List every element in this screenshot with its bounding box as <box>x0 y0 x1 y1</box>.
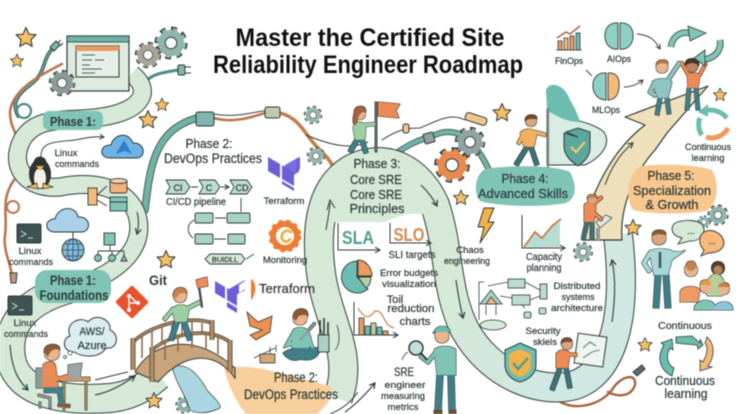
person: at whiteboard <box>552 333 607 390</box>
icon: terminal lower <box>8 296 32 315</box>
text: Linux commands lower: Linux <box>14 318 37 329</box>
text: Security skiels <box>526 326 561 348</box>
text: SRE engineer measuring metrics: metrics <box>388 402 419 413</box>
text: Git: Git <box>149 272 167 288</box>
cloud: AWS Azure: Azure <box>78 340 106 352</box>
text: Chaos engineering: Chaos <box>456 245 484 256</box>
icon: penguin <box>27 156 53 189</box>
text: AIOps: AIOps <box>607 54 631 65</box>
text: Linux commands middle <box>9 246 53 268</box>
text: CI/CD pipeline: CI/CD pipeline <box>166 197 226 208</box>
title: Master the Certified Site <box>236 24 505 52</box>
cable plugs <box>10 40 645 376</box>
text: Linux commands upper: commands <box>55 159 99 170</box>
arrows from ops icons <box>586 34 660 87</box>
arrow: growth <box>585 86 708 240</box>
icon: terraform top <box>268 157 300 191</box>
person: presenter <box>644 230 686 308</box>
text: SRE engineer measuring metrics: measuring <box>381 391 425 402</box>
chart: pie error budgets <box>341 260 372 293</box>
road: phase 1 lower <box>10 212 158 399</box>
icon: terminal upper <box>17 224 41 243</box>
tool box <box>254 345 276 363</box>
heading: Phase 3: Core SRE <box>350 187 402 202</box>
text: Continuous learning bottom: Continuous <box>655 374 715 388</box>
text: Toil reduction charts: Toil <box>387 294 403 306</box>
icon: speech bubbles: ... <box>687 226 695 236</box>
label: Phase 5 <box>628 165 717 214</box>
CI/CD pipeline chevrons: CD <box>236 183 249 193</box>
text: Toil reduction charts: reduction <box>388 303 434 315</box>
text: Chaos engineering <box>444 245 490 267</box>
icon: azure cloud <box>102 135 143 158</box>
heading: Phase 3: Core SRE <box>350 172 402 187</box>
heading: Phase 3 <box>350 156 405 216</box>
label: Phase 1 Foundations <box>35 270 111 303</box>
text: MLOps: MLOps <box>592 105 620 116</box>
wire arrow to azure <box>41 137 104 157</box>
text: Toil reduction charts <box>387 294 434 328</box>
text: Linux commands middle: commands <box>9 257 53 268</box>
icon: mug of tools <box>318 318 329 352</box>
text: Chaos engineering: engineering <box>444 256 490 267</box>
label: Phase 1 <box>43 111 103 130</box>
cables: plugs and wires <box>5 46 635 406</box>
icon: AIOps brain <box>605 23 633 49</box>
chart: SLO: SLO <box>394 225 424 245</box>
CI/CD pipeline chevrons: C <box>206 183 213 193</box>
label: Phase 1 Foundations: Foundations <box>40 288 108 303</box>
text: Capacity planning: planning <box>526 263 562 274</box>
text: Capacity planning: Capacity <box>526 252 562 263</box>
icon: cycle arrows top <box>671 26 720 66</box>
label: Phase 4 Advanced Skills: Advanced Skills <box>478 186 568 201</box>
icon: git <box>115 285 149 319</box>
person: Phase 3 with flag <box>350 102 400 153</box>
text: Continuous learning upper: Continuous <box>685 142 731 153</box>
text: SRE engineer measuring metrics <box>381 365 426 413</box>
text: SRE engineer measuring metrics: SRE <box>394 365 414 379</box>
title: Reliability Engineer Roadmap <box>213 51 523 79</box>
text: Continuous learning bottom <box>655 374 715 401</box>
road: phase 2 orange section <box>224 367 332 414</box>
person: sitting with wrench <box>283 309 320 360</box>
label: Phase 5: Phase 5: <box>648 168 694 183</box>
icon: MLOps brain <box>593 73 619 100</box>
text: Linux commands lower <box>4 318 48 340</box>
text: SRE engineer measuring metrics: engineer <box>384 380 426 391</box>
cloud: AWS Azure <box>64 317 116 358</box>
bridge <box>133 320 235 382</box>
text: Linux commands upper: Linux <box>55 148 78 159</box>
text: Continuous learning bottom: learning <box>664 387 708 401</box>
text: Error budgets: visualization <box>382 279 436 290</box>
label: Phase 2 DevOps Practices: DevOps Practices <box>244 387 338 402</box>
icon: cloud and globe <box>47 209 89 261</box>
icon: grafana monitoring <box>270 221 300 251</box>
text: Error budgets: Error budgets <box>380 268 438 279</box>
label: Phase 5: & Growth <box>646 197 698 212</box>
terraform big label: Terraform <box>259 281 315 296</box>
text: SLI targets: SLI targets <box>388 250 436 261</box>
icon: cycle arrows lower <box>698 104 728 138</box>
icon: speech bubbles: ... <box>708 236 716 246</box>
icon: security shield <box>505 343 536 382</box>
label: Phase 4 Advanced Skills <box>476 166 575 206</box>
label: Phase 2 DevOps Practices: Phase 2: <box>274 370 318 385</box>
label: Phase 2 DevOps Practices <box>244 370 338 402</box>
window: terminal <box>67 36 129 91</box>
chart: toil bars <box>354 302 398 335</box>
cloud: AWS Azure: AWS/ <box>80 326 105 338</box>
river <box>172 366 220 413</box>
icon: FinOps chart <box>556 26 582 50</box>
diagram: distributed systems <box>479 279 547 330</box>
heading: Phase 2 DevOps <box>164 136 262 166</box>
heading: Phase 2 DevOps: Phase 2: <box>186 136 232 151</box>
CI/CD pipeline chevrons <box>166 180 252 194</box>
chart: SLA <box>338 223 380 250</box>
text: Distributed systems architecture: architecture <box>551 303 603 314</box>
text: Security skiels: Security <box>526 326 561 337</box>
label: Phase 1: Phase 1: <box>50 114 96 129</box>
people: audience <box>680 261 733 310</box>
label: Phase 1 Foundations: Phase 1: <box>50 273 96 288</box>
text: FinOps: FinOps <box>555 56 583 67</box>
road: phase 3 and 4 <box>319 160 621 414</box>
person: on bridge with flag <box>164 277 208 340</box>
chart: capacity planning <box>522 215 565 248</box>
title <box>213 24 523 79</box>
text: Toil reduction charts: charts <box>400 316 431 328</box>
icon: speech bubbles <box>672 220 724 256</box>
icon: terraform lower <box>215 280 245 313</box>
text: Linux commands lower: commands <box>4 329 48 340</box>
text: Distributed systems architecture <box>551 281 603 314</box>
person: walking <box>516 115 546 165</box>
text: Linux commands upper <box>55 148 99 170</box>
chart: SLA: SLA <box>342 228 374 248</box>
text: Distributed systems architecture: systems <box>562 292 595 303</box>
icon: cycle arrows bottom <box>660 336 713 376</box>
icon: database and document <box>88 178 127 211</box>
icon: orange fox shape <box>247 312 272 340</box>
road: phase 1 upper <box>17 74 142 288</box>
flow diagram: BUIDLL <box>212 255 238 264</box>
text: Security skiels: skiels <box>533 337 557 348</box>
person: top of road with podium <box>583 194 612 241</box>
text: Linux commands middle: Linux <box>19 246 42 257</box>
heading: Phase 2 DevOps: DevOps Practices <box>164 151 262 166</box>
text: Error budgets <box>380 268 438 290</box>
flow diagram <box>188 198 254 264</box>
icon: org chart <box>94 233 127 262</box>
label: Phase 4 Advanced Skills: Phase 4: <box>502 171 548 186</box>
heading: Phase 3: Principles <box>350 201 405 216</box>
text: Terraform label: Terraform <box>264 196 304 207</box>
text: Continuous top: Continuous <box>658 320 712 332</box>
text: Continuous learning upper <box>685 142 731 164</box>
person: SRE engineer <box>402 326 456 412</box>
text: Monitoring: Monitoring <box>263 255 307 266</box>
text: Continuous learning upper: learning <box>692 153 724 164</box>
CI/CD pipeline chevrons: CI <box>174 183 182 193</box>
big flag with shield <box>546 85 607 168</box>
person: at laptop <box>36 344 90 410</box>
label: Phase 5: Specialization <box>633 183 711 198</box>
icon: lightning <box>478 208 494 243</box>
heading: Phase 3: Phase 3: <box>354 156 400 171</box>
text: Distributed systems architecture: Distributed <box>554 281 600 292</box>
people: high five <box>650 58 706 115</box>
text: Capacity planning <box>526 252 562 274</box>
